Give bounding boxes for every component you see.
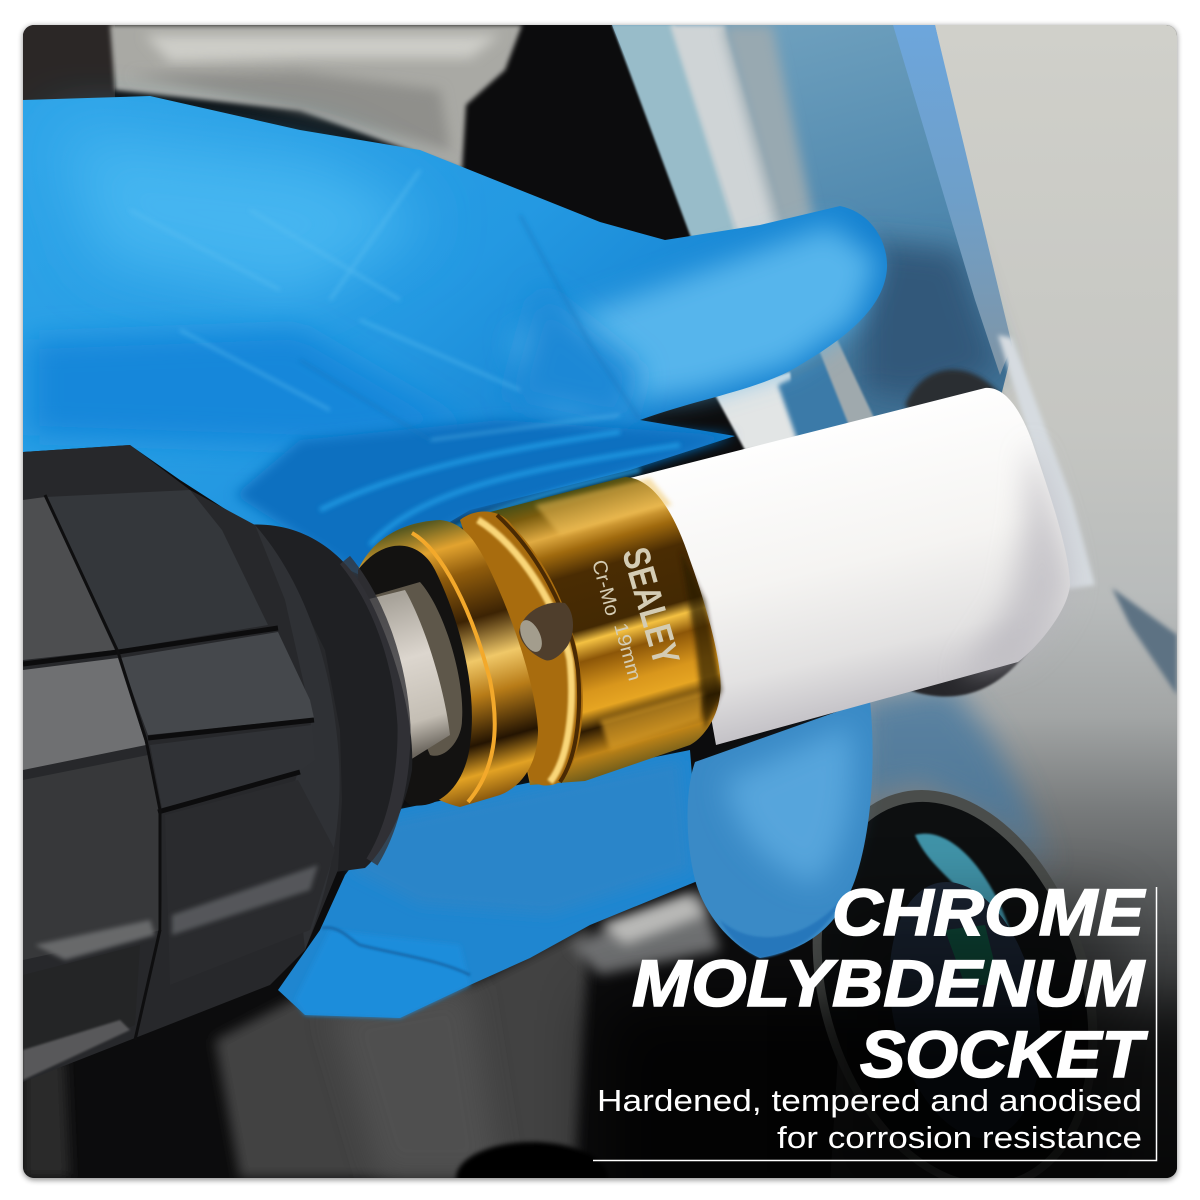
heading: MOLYBDENUM: MOLYBDENUM: [632, 946, 1146, 1020]
wrench grip: upper dark block: [45, 490, 268, 650]
finger shading: [516, 307, 653, 421]
subheading line 1: Hardened, tempered and anodised: [597, 1083, 1142, 1118]
wrench collar: [255, 525, 340, 950]
back of hand highlight: [60, 130, 430, 300]
silver spoke ridge: [670, 25, 790, 240]
background: blue spoke: [612, 25, 1012, 450]
wrench grip: grooves: [23, 628, 314, 812]
background: rim recess: [1112, 588, 1177, 695]
impact wrench: [23, 445, 412, 1082]
heading: CHROME: CHROME: [832, 875, 1146, 949]
subheading line 2: for corrosion resistance: [777, 1120, 1142, 1155]
background: pale rim edge: [998, 335, 1095, 590]
white gap under finger: [715, 372, 800, 450]
background: centre badge: [812, 790, 1088, 1178]
silver strip under finger: [819, 340, 874, 423]
wrench grip: speckled left panels: [23, 497, 115, 660]
white plastic sleeve: [630, 388, 1070, 745]
finger crease: [322, 928, 470, 975]
fingertip under socket: [688, 700, 873, 958]
laser etched 19mm: 19mm: [609, 621, 645, 683]
socket face: [358, 546, 472, 806]
socket groove ring: [460, 512, 583, 786]
blue glove: main hand: [23, 96, 887, 575]
hole shadow below sleeve: [910, 654, 1028, 698]
palm fold shading: [235, 420, 735, 575]
wrench grip: middle block: [120, 632, 314, 735]
laser etched Cr-Mo: Cr-Mo: [587, 558, 623, 618]
caption corner rule: [593, 887, 1156, 1160]
retaining pin hole: [519, 603, 573, 660]
gold socket: [358, 477, 722, 807]
background: rim silver: [830, 25, 1185, 1185]
background: lower grey and dark surround: [23, 890, 720, 1200]
laser etched SEALEY: SEALEY: [613, 543, 687, 670]
caption block: [597, 875, 1148, 1155]
dark spoke shade: [860, 240, 1000, 400]
index finger highlight: [510, 225, 878, 412]
wrench body: [23, 445, 342, 1082]
grey spoke transition: [722, 25, 815, 240]
lower hand shading: [30, 330, 470, 445]
background: lug hole shadow: [902, 367, 1004, 408]
background: lower blue reflection: [870, 691, 1048, 859]
blue glove: lower fingers: [278, 700, 873, 1018]
drive anvil: [365, 590, 450, 760]
background: upper wheel and dark gap: [15, 15, 522, 170]
wrench grip: lower block: [150, 725, 315, 808]
teal spoke edge: [612, 25, 740, 243]
dark fade behind caption: [600, 900, 1200, 1200]
wrench rubber nose: [245, 524, 412, 872]
socket body: [490, 477, 721, 785]
blue spoke band: [893, 25, 1012, 375]
socket collar: [358, 520, 538, 807]
heading: SOCKET: SOCKET: [860, 1017, 1148, 1091]
